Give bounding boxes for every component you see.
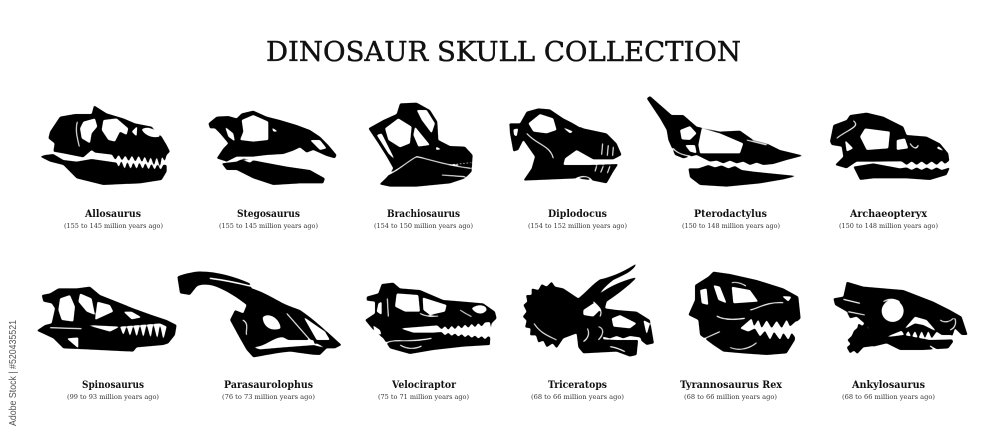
label: Spinosaurus <box>67 379 159 401</box>
label: Tyrannosaurus Rex: (68 to 66 million years ago) <box>684 393 777 401</box>
label: Archaeopteryx: (150 to 148 million years ago) <box>839 222 938 230</box>
label: Brachiosaurus: Brachiosaurus <box>387 208 460 220</box>
label: Ankylosaurus: Ankylosaurus <box>851 379 925 391</box>
label: Tyrannosaurus Rex: Tyrannosaurus Rex <box>680 379 783 391</box>
label: Stegosaurus <box>219 208 318 230</box>
skull: Spinosaurus <box>37 287 177 352</box>
stock credit: Adobe Stock | #520435521 <box>8 320 19 426</box>
label: Archaeopteryx <box>839 208 938 230</box>
label: Ankylosaurus <box>842 379 935 401</box>
label: Stegosaurus: Stegosaurus <box>237 208 300 220</box>
label: Parasaurolophus: (76 to 73 million years ago) <box>222 393 315 401</box>
skull: Ankylosaurus <box>833 282 968 354</box>
skull: Velociraptor <box>365 283 497 354</box>
label: Diplodocus: Diplodocus <box>548 208 607 220</box>
label: Velociraptor: (75 to 71 million years ago) <box>378 393 469 401</box>
label: Triceratops <box>531 379 624 401</box>
label: Archaeopteryx: Archaeopteryx <box>849 208 928 220</box>
label: Brachiosaurus <box>374 208 473 230</box>
label: Stegosaurus: (155 to 145 million years ago) <box>219 222 318 230</box>
skull: Diplodocus <box>509 108 622 183</box>
label: Parasaurolophus: Parasaurolophus <box>224 379 313 391</box>
skull: Stegosaurus <box>208 111 337 185</box>
label: Allosaurus: (155 to 145 million years ago) <box>64 222 163 230</box>
skull: Parasaurolophus <box>177 272 342 357</box>
label: Spinosaurus: Spinosaurus <box>82 379 144 391</box>
skull: Allosaurus <box>40 105 170 185</box>
label: Diplodocus: (154 to 152 million years ago) <box>528 222 627 230</box>
label: Pterodactylus <box>682 208 780 230</box>
skull: Triceratops <box>523 263 654 357</box>
label: Triceratops: Triceratops <box>548 379 607 391</box>
skull: Tyrannosaurus Rex <box>688 272 801 355</box>
label: Spinosaurus: (99 to 93 million years ago) <box>67 393 159 401</box>
label: Ankylosaurus: (68 to 66 million years ago) <box>842 393 935 401</box>
label: Allosaurus <box>64 208 163 230</box>
skull: Brachiosaurus <box>368 103 473 187</box>
label: Brachiosaurus: (154 to 150 million years ago) <box>374 222 473 230</box>
title: DINOSAUR SKULL COLLECTION <box>266 37 741 68</box>
label: Velociraptor <box>378 379 469 401</box>
skull: Archaeopteryx <box>830 113 950 180</box>
label: Parasaurolophus <box>222 379 315 401</box>
label: Pterodactylus: (150 to 148 million years ago) <box>682 222 780 230</box>
label: Velociraptor: Velociraptor <box>391 379 456 391</box>
label: Tyrannosaurus Rex <box>680 379 783 401</box>
skull collection <box>20 85 990 375</box>
label: Diplodocus <box>528 208 627 230</box>
label: Allosaurus: Allosaurus <box>84 208 141 220</box>
skull: Pterodactylus <box>647 96 803 187</box>
label: Pterodactylus: Pterodactylus <box>694 208 767 220</box>
label: Triceratops: (68 to 66 million years ago) <box>531 393 624 401</box>
